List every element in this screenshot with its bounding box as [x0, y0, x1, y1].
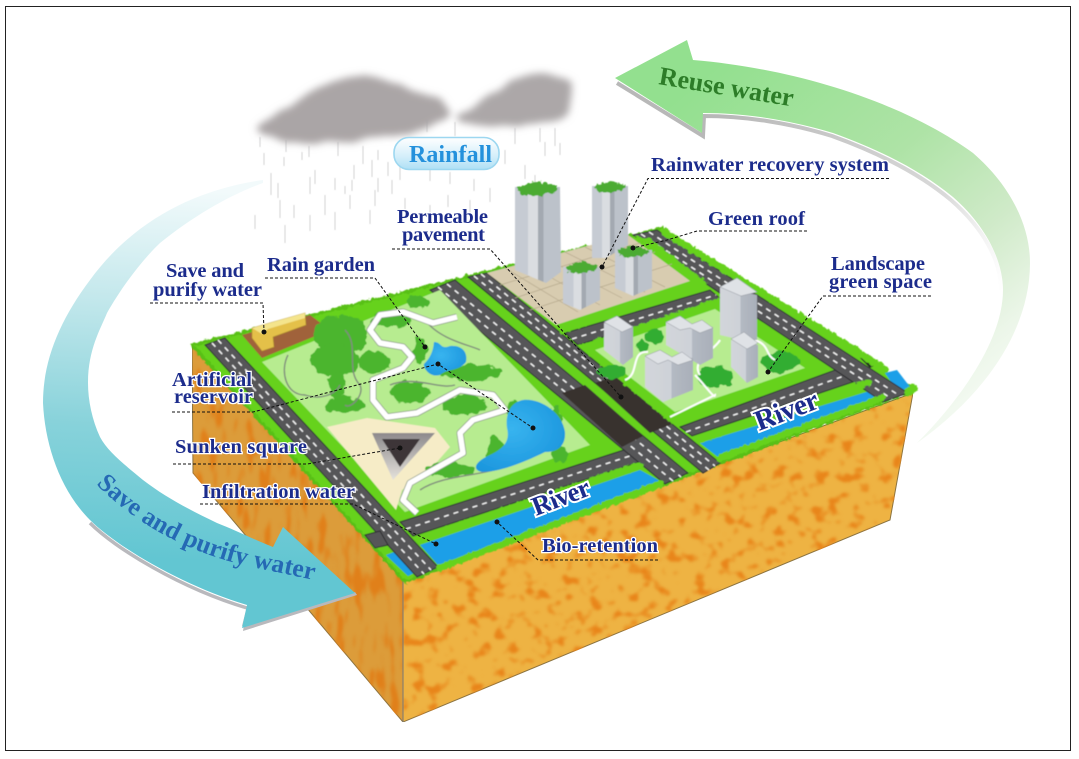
lake: large	[476, 400, 565, 472]
river: right end	[885, 370, 910, 392]
permeable pavement on roads	[562, 376, 672, 447]
arrow label: reuse water: Reuse water	[657, 61, 796, 112]
river: front left end	[386, 550, 420, 576]
cloud: left	[255, 76, 450, 144]
rain	[255, 120, 560, 243]
tower: E	[604, 316, 633, 365]
river: front right	[700, 390, 880, 457]
rainfall label: Rainfall	[409, 142, 492, 168]
label: sunken square	[173, 436, 402, 464]
label: bio-retention	[494, 520, 659, 560]
arrow: save and purify water: Save and purify water	[98, 474, 316, 580]
park	[242, 290, 590, 513]
river: front left	[420, 470, 662, 565]
landscape block	[578, 298, 827, 424]
rainfall label	[394, 138, 499, 170]
towers	[515, 181, 758, 402]
arrow: reuse water	[615, 40, 1030, 443]
road: stub	[365, 531, 388, 548]
label: green roof	[630, 208, 807, 250]
label: bio-retention: Bio-retention	[542, 535, 659, 557]
tower: I	[731, 332, 758, 383]
top surface	[192, 181, 915, 582]
tower: C with green roof	[563, 261, 600, 310]
label: river right: River	[750, 384, 823, 438]
label: artificial reservoir: reservoir	[174, 386, 253, 408]
label: sunken square: Sunken square	[175, 436, 307, 458]
sunken square	[372, 433, 435, 480]
sponge block	[192, 345, 913, 722]
road: park front	[400, 447, 645, 536]
label: artificial reservoir: Artificial	[172, 369, 252, 391]
path: white winding	[370, 312, 505, 513]
arrow: save and purify water	[43, 180, 357, 631]
tower: A with green roof	[515, 181, 561, 283]
land: brown plot	[242, 315, 330, 358]
road: block front	[680, 370, 853, 436]
tower: G	[645, 350, 693, 402]
label: artificial reservoir	[172, 362, 536, 430]
label: permeable pavement: Permeable	[397, 206, 488, 228]
lake: small	[424, 342, 466, 376]
landscape paths	[625, 340, 775, 417]
clouds	[255, 74, 572, 144]
label: save and purify water: purify water	[153, 279, 262, 301]
road: left	[205, 338, 438, 577]
label: permeable pavement: pavement	[402, 224, 485, 246]
plaza green border	[556, 236, 708, 334]
sand	[327, 418, 450, 510]
label: rainwater recovery system	[600, 154, 889, 270]
base green	[192, 228, 915, 582]
tower: D with green roof	[615, 245, 652, 296]
road: plaza lower	[565, 290, 722, 345]
label: save and purify water: Save and	[166, 260, 245, 282]
label: save and purify water	[150, 260, 266, 334]
plaza paving	[487, 235, 690, 325]
tower: H	[720, 278, 757, 340]
label: rainwater recovery system: Rainwater recovery system	[651, 154, 889, 176]
label: landscape green space: Landscape	[831, 253, 925, 275]
building: yellow	[252, 313, 306, 351]
path: gray walkways	[284, 320, 540, 490]
sponge: left face	[192, 345, 403, 722]
label: river left: River	[527, 472, 594, 522]
label: green roof: Green roof	[708, 208, 806, 230]
landscape trees	[598, 328, 799, 388]
label: permeable pavement	[392, 206, 624, 400]
label: infiltration water: Infiltration water	[202, 481, 355, 503]
tower: F	[666, 316, 713, 365]
label: infiltration water	[200, 481, 438, 546]
label: landscape green space: green space	[829, 271, 932, 293]
cloud: right	[457, 74, 572, 126]
sponge: front face	[403, 393, 913, 722]
road: central two	[468, 273, 720, 473]
green river banks	[420, 232, 913, 568]
road: right	[633, 230, 908, 402]
label: landscape green space	[766, 253, 932, 374]
trees	[310, 296, 568, 477]
label: rain garden	[265, 254, 428, 350]
road: central one	[430, 280, 688, 484]
label: rain garden: Rain garden	[267, 254, 376, 276]
tower: B with green roof	[592, 181, 628, 258]
